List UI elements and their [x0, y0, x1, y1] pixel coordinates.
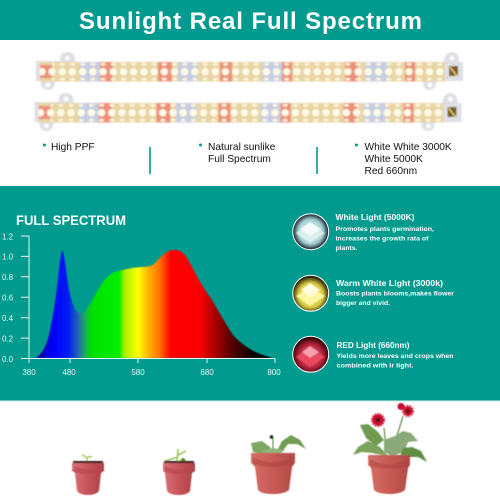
white light description: increases the growth rata of — [336, 236, 429, 242]
chart heading: FULL SPECTRUM — [16, 213, 126, 228]
warm white light description: Warm White Light (3000k) — [336, 278, 443, 288]
spectrum chart — [2, 232, 281, 377]
plant 4: flowering gerbera in pot — [353, 403, 427, 494]
title: Sunlight Real Full Spectrum — [79, 8, 422, 35]
icon: white light chip — [293, 214, 329, 250]
header band — [0, 0, 500, 40]
LED strip 2 — [34, 93, 462, 131]
spectrum chart: 0.6 — [2, 294, 14, 302]
white light description — [336, 212, 434, 252]
spectrum chart: 0.2 — [2, 334, 14, 344]
red light description: Yields more leaves and crops when — [336, 353, 454, 360]
spectrum chart: 0.8 — [2, 273, 14, 282]
feature: LED colour list: Red 660nm — [364, 166, 417, 177]
divider 1 — [149, 147, 151, 174]
plant 3: budding plant in pot — [251, 435, 306, 494]
spectrum chart: 1.0 — [2, 252, 14, 262]
spectrum chart: 800 — [267, 368, 281, 377]
feature: natural sunlike full spectrum — [199, 142, 276, 165]
icon: red light chip — [293, 336, 329, 372]
icon: warm white light chip — [293, 275, 329, 311]
spectrum chart: 380 — [22, 368, 36, 377]
spectrum chart: 0.0 — [2, 355, 14, 364]
warm white light description: bigger and vivid. — [336, 300, 390, 307]
white light description: White Light (5000K) — [336, 212, 415, 222]
plant 1: small seedling in pot — [72, 455, 104, 495]
feature: natural sunlike full spectrum: Full Spectrum — [208, 154, 271, 165]
spectrum chart: 0.4 — [2, 314, 14, 323]
red light description: combined with ir light. — [336, 362, 414, 370]
feature: natural sunlike full spectrum: Natural sunlike — [208, 142, 276, 153]
warm white light description — [336, 278, 454, 307]
feature: LED colour list: White White 3000K — [364, 142, 452, 153]
spectrum chart: 1.2 — [2, 232, 14, 242]
spectrum chart: 480 — [62, 368, 76, 377]
panel: spectrum section — [0, 186, 500, 401]
red light description: RED Light (660nm) — [336, 340, 410, 350]
plant 2: seedling with leaves in pot — [163, 449, 195, 495]
white light description: plants. — [336, 245, 358, 252]
feature: high PPF: High PPF — [51, 142, 95, 153]
divider 2 — [316, 147, 318, 174]
spectrum chart: 580 — [131, 368, 145, 377]
feature: LED colour list: White 5000K — [364, 154, 423, 165]
spectrum chart: 680 — [200, 368, 214, 377]
feature: LED colour list — [355, 142, 452, 177]
LED strip 1 — [36, 52, 463, 90]
white light description: Promotes plants germination, — [336, 226, 434, 233]
warm white light description: Boosts plants blooms,makes flower — [336, 290, 454, 298]
red light description — [336, 340, 454, 370]
